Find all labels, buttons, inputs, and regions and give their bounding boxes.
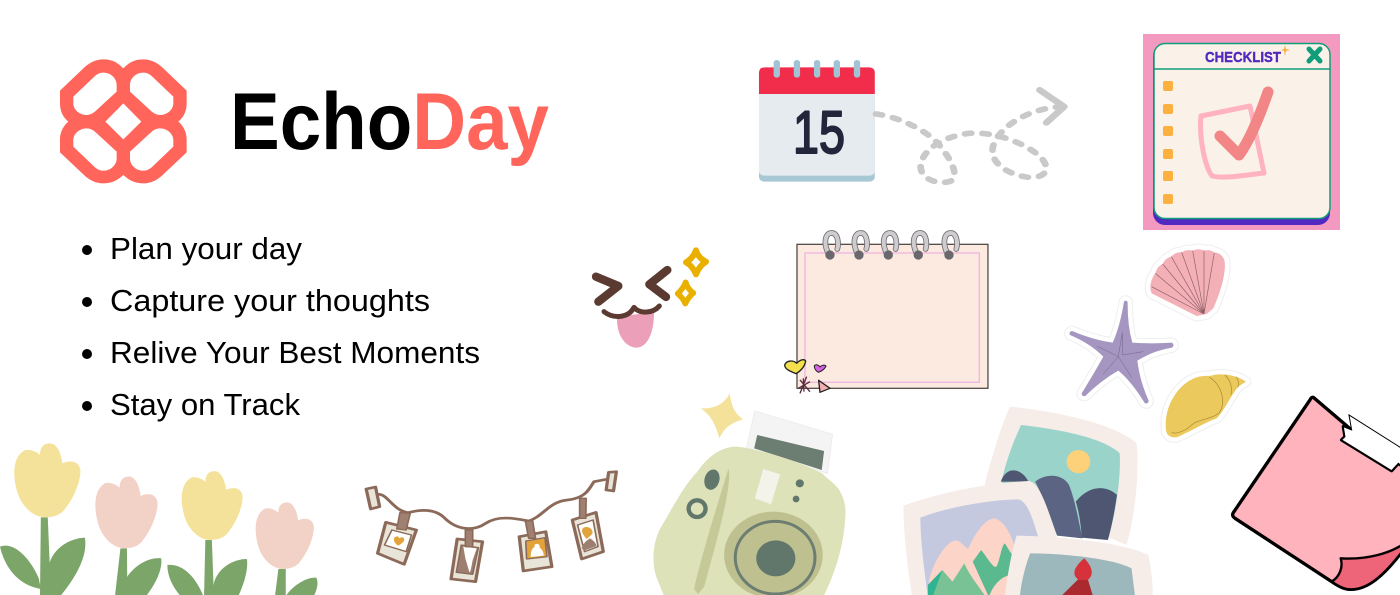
feature bullet list [82,231,480,422]
panel: spiral notebook page [785,233,988,393]
panel: checklist card [1143,34,1340,230]
icon: pink torn sticky note [1233,397,1400,589]
icon: check mark in box [1201,92,1268,177]
camera film [746,411,833,473]
sticker: starfish [1069,301,1173,403]
feature bullet list: Stay on Track [110,387,300,422]
icon: sparkle diamonds [678,250,706,304]
wordmark: EchoDay: EchoDay [230,77,549,167]
feature bullet list: Capture your thoughts [110,283,430,318]
illustration: stacked photos [903,407,1153,595]
photo: red tower [1005,536,1153,595]
notebook rings [825,233,957,260]
feature bullet list: Plan your day [110,231,303,266]
photo: pink mountains [903,481,1057,595]
icon: sparkles [1281,45,1290,56]
sticker: scallop shell [1150,249,1225,316]
doodles: hearts and marks [785,360,830,393]
icon: calendar [759,63,875,182]
camera details [689,468,823,595]
arrow: dashed looping arrow [876,90,1064,182]
icon: close X [1309,49,1320,61]
illustration: photo garland [366,472,616,582]
photo: sun and hills [985,407,1138,545]
feature bullet list: Relive Your Best Moments [110,335,480,370]
torn white tape [1342,415,1400,471]
checklist heading: CHECKLIST [1205,49,1281,66]
illustration: instant camera [653,393,845,595]
list markers [1163,81,1173,204]
illustration: tulips [0,443,317,595]
icon: winking face [596,250,706,348]
sticker: conch shell [1166,374,1246,437]
logo mark [60,59,187,183]
camera body [653,447,845,595]
icon: calendar: 15 [793,99,845,166]
icon: sparkle star [701,393,743,438]
curled corner [1332,544,1400,589]
